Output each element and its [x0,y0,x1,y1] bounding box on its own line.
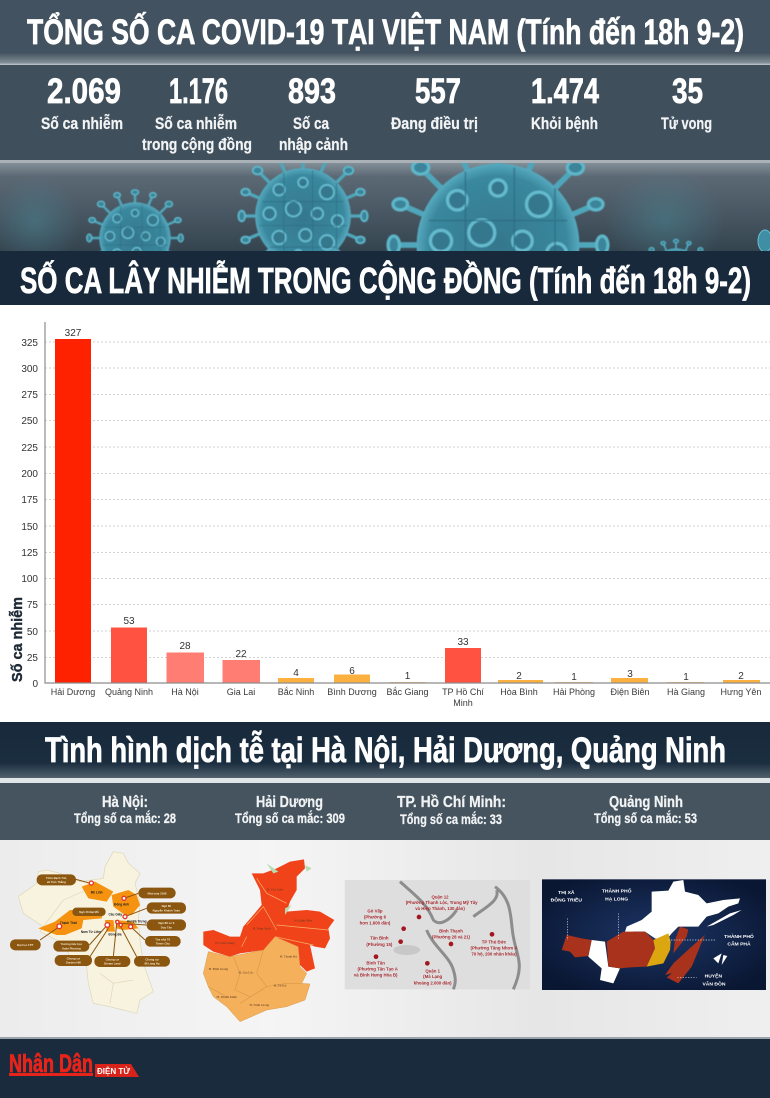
map: Hải Dương: H. Kinh Môn [294,919,313,923]
total: TP. Hồ Chí Minh [397,794,506,827]
bar: Quảng Ninh [105,616,153,697]
bar: Hải Phòng: 1 [571,672,577,683]
map: TP. Hồ Chí Minh: (Phường Tăng Nhơn A [471,945,518,950]
map: Quảng Ninh: HUYỆN [705,971,722,979]
stat: under treatment [391,72,478,133]
map: TP. Hồ Chí Minh: (Phường Tân Tạo A [357,967,399,972]
y axis tick labels: 100 [21,574,38,585]
map: Quảng Ninh: HẠ LONG [605,896,628,902]
stat: imported cases [279,72,348,154]
y axis tick labels: 150 [21,522,38,533]
stat: deaths [661,72,712,133]
map: Hà Nội: Mê Linh [91,890,103,894]
y axis tick labels [21,338,38,690]
bar: Điện Biên [610,669,650,697]
y axis tick labels: 225 [21,443,38,454]
map: Hà Nội: Đống Đa [109,932,122,936]
map: TP. Hồ Chí Minh: (Phường 6 [364,915,387,920]
map: Hà Nội: Đông Anh [114,902,129,906]
bar: Hà Nội [166,641,204,697]
y axis tick labels: 200 [21,469,38,480]
map: TP. Hồ Chí Minh: (Phường 28 và 21) [432,935,471,940]
map: Quảng Ninh: THÀNH PHỐ [602,888,632,895]
map: Hà Nội: Dream Land [104,962,121,966]
map: TP. Hồ Chí Minh: Tân Bình [370,936,389,941]
stat: deaths: 35 [672,72,703,111]
bar: Hà Giang: Hà Giang [667,687,705,697]
map: Hải Dương: H. Gia Lộc [239,970,254,974]
epidemic situation heading band [0,722,770,783]
bar: Bắc Giang [386,671,429,697]
bar: Bắc Ninh: Bắc Ninh [278,687,314,697]
bar: Bắc Giang: 1 [405,671,411,682]
bar: TP Hồ Chí Minh: 33 [457,637,469,648]
icon: large virus [388,135,608,347]
map: TP. Hồ Chí Minh: TP Thủ Đức [482,939,507,944]
map: Hà Nội: Thôn Bạch Trữ, [46,876,67,880]
map: Hà Nội: Chung cư [67,956,81,960]
map: TP. Hồ Chí Minh: (Phường Thạnh Lộc, Trung Mỹ Tây [406,900,478,905]
map: Hà Nội: 86 Láng Hạ [144,962,160,966]
map: Hải Dương: H. Thanh Miện [216,995,237,999]
bar: Hải Dương: 327 [65,328,82,339]
map: Hải Dương: H. Chí Linh [267,888,283,892]
bar: Hưng Yên: Hưng Yên [721,687,761,697]
map: Hà Nội: Nguyễn Khánh Toàn [153,908,180,912]
total: Hải Dương: Hải Dương [256,794,323,811]
map: Hà Nội: Nam Từ Liêm [81,930,101,934]
bar: Hưng Yên [721,671,761,697]
map: Hải Dương [203,859,334,1022]
stat: total cases: 2.069 [47,72,121,111]
stat: total cases: Số ca nhiễm [41,114,123,133]
map: Hà Nội: Hai Bà Trưng [127,920,147,924]
bar: Hải Dương [51,328,95,697]
map: Hải Dương: H. Tứ Kỳ [274,984,287,988]
map: TP. Hồ Chí Minh: 70 hộ, 200 nhân khẩu) [471,951,517,956]
bar: Bắc Ninh: 4 [293,668,299,679]
map: Quảng Ninh: THÀNH PHỐ [724,933,754,940]
map: Hải Dương: H. Cẩm Giàng [215,940,235,945]
icon: cropped virus spike [758,230,770,252]
map: Hà Nội: Times City [156,942,170,946]
bar: Hải Phòng: Hải Phòng [553,687,595,697]
logo: Nhân Dân Điện Tử: ĐIỆN TỬ [97,1067,130,1076]
total: Hải Dương: Tổng số ca mắc: 309 [235,811,345,826]
map: TP. Hồ Chí Minh: Quận 1 [425,968,441,973]
map: Hà Nội: Đại học FPT [17,943,34,947]
map: Hà Nội: Thạch Thất [60,921,78,925]
stat: community cases: trong cộng đồng [142,135,252,154]
map: Hải Dương: H. Ninh Giang [249,1003,270,1007]
map: Hà Nội: Ngõ 46 Đại Mỗ [79,910,99,914]
stat: total cases [41,72,123,133]
map: Quảng Ninh: CẨM PHẢ [727,940,751,947]
map: Hà Nội: Nhà máy 2168 [148,891,167,895]
map: Hà Nội: Cầu Giấy [108,912,122,916]
bar: Hòa Bình: 2 [516,671,522,682]
bar chart [0,305,770,720]
y axis tick labels: 125 [21,548,38,559]
stats panel [0,65,770,163]
bar: Bình Dương [327,666,377,697]
bar: Hải Dương: Hải Dương [51,687,95,697]
total: Hải Dương [235,794,345,826]
map: TP. Hồ Chí Minh: (Phường 15) [366,942,393,947]
bar: Hòa Bình: Hòa Bình [500,687,538,697]
map: TP. Hồ Chí Minh [345,880,530,989]
total: Hà Nội [74,794,176,826]
map: Quảng Ninh: VÂN ĐỒN [702,980,726,987]
total: Quảng Ninh [594,794,697,826]
bar: Bắc Ninh [278,668,314,697]
map: Hà Nội: Chung cư [145,957,160,961]
bar: Hà Nội: Hà Nội [171,687,199,697]
stat: community cases: Số ca nhiễm [155,114,237,133]
stat: under treatment: Đang điều trị [391,114,478,133]
map: TP. Hồ Chí Minh: và Bình Hưng Hòa B) [354,973,398,978]
y axis tick labels: 250 [21,416,38,427]
map: TP. Hồ Chí Minh: khoảng 2.000 dân) [414,980,452,985]
stat: recovered: 1.474 [531,72,599,111]
logo: Nhân Dân Điện Tử: Nhân Dân [9,1050,93,1078]
stat: imported cases: Số ca [293,114,329,133]
map: Hà Nội: Duy Tân [161,925,172,929]
map: Hà Nội: Ngõ 80 [162,904,171,908]
stat: deaths: Tử vong [661,114,712,133]
map: Hà Nội: Trường tiểu học [60,942,83,946]
map: Hà Nội: Ngõ 86 số 6 [158,921,175,925]
bar: Gia Lai: Gia Lai [227,687,255,697]
map: Hà Nội: Chung cư [106,957,120,961]
icon: small virus [87,190,183,283]
map: Hải Dương: H. Thanh Hà [280,954,297,958]
bar: Gia Lai [222,649,260,697]
bar: Quảng Ninh: 53 [123,616,135,627]
bar: Hưng Yên: 2 [738,671,744,682]
icon: distant virus [641,239,711,306]
map: Quảng Ninh: ĐÔNG TRIỀU [551,896,582,904]
y axis tick labels: 325 [21,338,38,349]
map: Quảng Ninh: THỊ XÃ [558,889,575,896]
bar: Bình Dương: Bình Dương [327,687,377,697]
total: Quảng Ninh: Quảng Ninh [609,794,683,811]
bar: Quảng Ninh: Quảng Ninh [105,687,153,697]
bar: Hà Giang [667,672,705,697]
map: TP. Hồ Chí Minh: Bình Thạnh [439,929,463,934]
total: TP. Hồ Chí Minh: Tổng số ca mắc: 33 [400,812,502,827]
map section background [0,840,770,1039]
bar: Bắc Giang: Bắc Giang [386,687,429,697]
y axis tick labels: 0 [32,679,38,690]
bar: Hà Giang: 1 [683,672,689,683]
bar: Hà Nội: 28 [179,641,191,652]
map: TP. Hồ Chí Minh: và Hiệp Thành, 130 dân) [415,906,465,911]
map: Hà Nội: Tòa nhà T6 [155,937,171,941]
map: Hà Nội: Xuân Phương [62,946,81,950]
stat: imported cases: nhập cảnh [279,135,348,154]
map: Hà Nội: xã Tiến Thắng [47,879,66,884]
map: TP. Hồ Chí Minh: hơn 1.600 dân) [360,921,391,926]
y axis tick labels: 50 [27,627,38,638]
stat: recovered: Khỏi bệnh [531,114,598,133]
stat: imported cases: 893 [288,72,336,111]
bar: Điện Biên: Điện Biên [610,687,650,697]
map: Hà Nội: Garden Hill [66,961,81,965]
map: Hà Nội [10,852,186,1013]
footer [0,1037,770,1098]
map: TP. Hồ Chí Minh: (Mả Lạng [423,974,443,979]
y axis title: Số ca nhiễm [9,597,26,682]
map: Hải Dương: H. Bình Giang [209,967,228,971]
bar: Gia Lai: 22 [235,649,247,660]
bar: Điện Biên: 3 [627,669,633,680]
total: Hà Nội: Tổng số ca mắc: 28 [74,811,176,826]
header band: national total [0,0,770,65]
map: TP. Hồ Chí Minh: Quận 12 [431,894,449,899]
bar: Hòa Bình [498,671,543,697]
stat: community cases [142,72,252,154]
total: Hà Nội: Hà Nội: [102,794,148,811]
bar: TP Hồ Chí Minh: TP Hồ Chí [442,687,484,697]
y axis tick labels: 275 [21,390,38,401]
regional totals panel [0,783,770,840]
bar: TP Hồ Chí Minh: Minh [453,698,473,708]
stat: community cases: 1.176 [169,72,228,111]
stat: under treatment: 557 [415,72,461,111]
map: TP. Hồ Chí Minh: Bình Tân [366,960,385,965]
stat: recovered [531,72,599,133]
map: Hải Dương: H. Nam Sách [253,926,271,930]
total: TP. Hồ Chí Minh: TP. Hồ Chí Minh: [397,794,506,811]
bar: Hải Phòng [553,672,595,697]
y axis tick labels: 175 [21,495,38,506]
bar: TP Hồ Chí Minh [442,637,484,708]
map: TP. Hồ Chí Minh: Gò Vấp [367,909,383,914]
virus illustration band [0,135,770,347]
icon: medium virus [238,151,368,276]
map: Quảng Ninh [542,879,766,990]
y axis tick labels: 25 [27,653,38,664]
total: Quảng Ninh: Tổng số ca mắc: 53 [594,811,697,826]
bar: Bình Dương: 6 [349,666,355,677]
y axis tick labels: 300 [21,364,38,375]
y axis tick labels: 75 [27,600,38,611]
